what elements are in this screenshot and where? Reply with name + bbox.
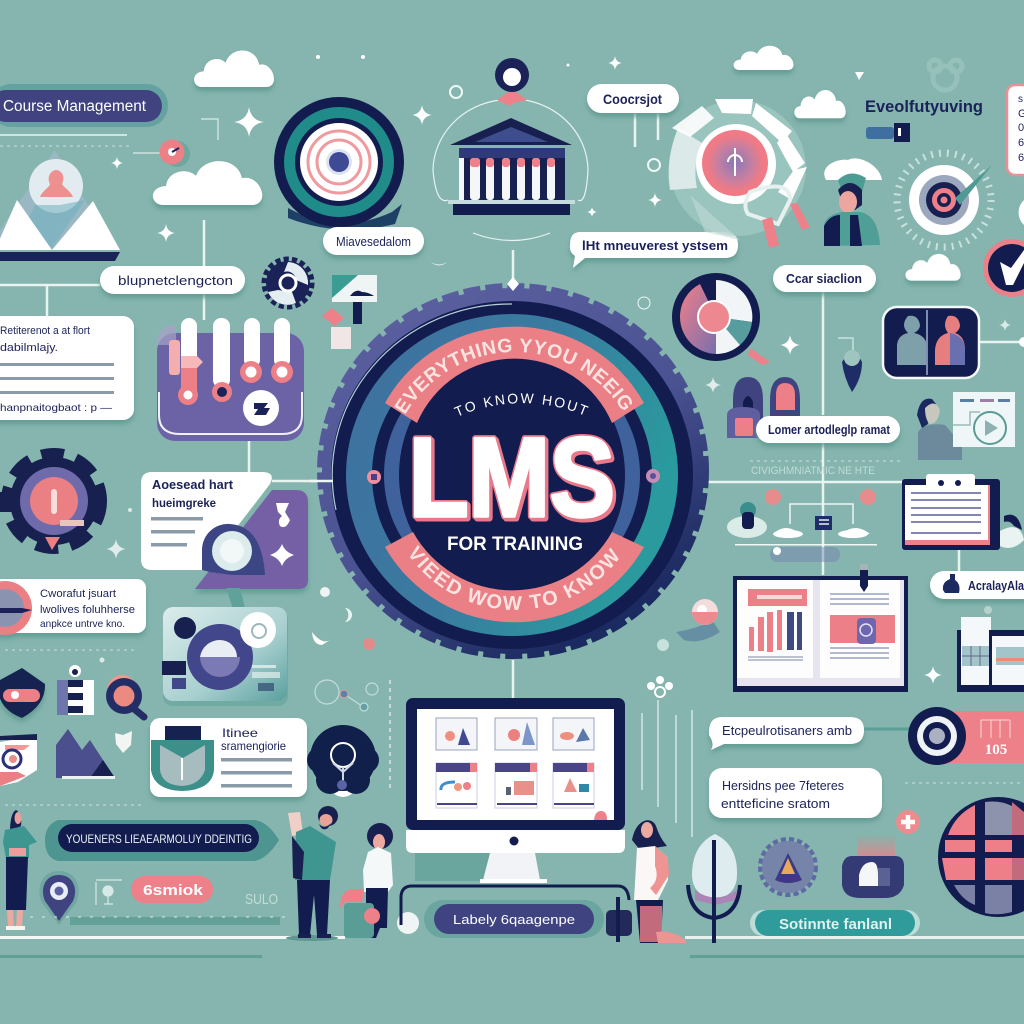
card: text: entteficine sratom: [721, 796, 830, 811]
monitor: [406, 698, 625, 883]
icon: open book: [733, 564, 908, 692]
bubble: management system: [570, 232, 738, 268]
label pill: course management: [0, 84, 168, 127]
blue ring: [346, 314, 678, 636]
pill: academy: [930, 571, 1024, 599]
top band: [385, 327, 644, 423]
icon: teal shield badge: [151, 726, 214, 791]
icon: building: [957, 606, 1024, 692]
connector lines: [0, 113, 1024, 837]
card: assessment with purple panel: [141, 472, 308, 589]
card: itinerary: [150, 718, 307, 797]
panel: gauge illustration: [162, 588, 288, 706]
navy rim: [331, 301, 693, 649]
bubble: text: Etcpeulrotisaners amb: [722, 724, 852, 738]
icon: purple gear with cone: [761, 840, 815, 894]
pill: car section: Ccar siaclion: [786, 271, 862, 286]
diamond marker: [507, 277, 519, 291]
panel: sliders: [157, 318, 304, 441]
heading: for training: FOR TRAINING: [447, 534, 583, 555]
stat number: 105: [985, 742, 1007, 758]
figure: man with paper: [286, 806, 338, 941]
heading: to know about: TO KNOW HOUT: [454, 393, 589, 416]
card: right top clipped: [1007, 85, 1024, 175]
icon: pen on target: [897, 153, 992, 247]
bubble: management system: lHt mneuverest ystsem: [582, 238, 728, 253]
icon: flower node: [647, 676, 673, 697]
slider one: [169, 318, 203, 405]
pediment: [450, 118, 572, 145]
screen thumbnails: [436, 718, 594, 808]
central emblem: [310, 283, 709, 659]
icon: lamp: [96, 880, 122, 905]
decorative stars: [106, 55, 1011, 684]
heading: LMS: LMS: [409, 415, 615, 540]
green arc: [1019, 200, 1024, 225]
stat badge: pink banner with target: [908, 707, 1024, 765]
icon: leaf tree lamp: [688, 834, 740, 943]
slider two: [212, 318, 232, 402]
label pill: teal: [750, 910, 920, 936]
card: assessment with purple panel: hueimgreke: [152, 496, 216, 510]
icon: broken badge wheel: [669, 99, 810, 248]
gear outer ring: [321, 287, 705, 655]
icon: check badge: [983, 239, 1024, 297]
target roundel: [274, 97, 404, 230]
faint logo: [929, 60, 962, 90]
card: text: Hersidns pee 7feteres: [722, 778, 844, 793]
card: reference text: Retiterenot a at flort: [0, 325, 90, 337]
side connector: [310, 480, 333, 482]
label pill: dark banner: [45, 820, 279, 861]
icon: node network: [315, 680, 378, 711]
figure: woman holding child: [632, 820, 686, 943]
navy core: [399, 353, 625, 597]
icon: small lamp: [838, 338, 862, 392]
icon: academy figure: [943, 574, 960, 593]
icon: white shield: [0, 734, 37, 786]
bar chart: [748, 610, 803, 660]
slider four: [271, 318, 293, 383]
card: reference text: hanpnaitogbaot : p —: [0, 402, 113, 414]
label pill: teal: Sotinnte fanlanl: [779, 916, 892, 933]
small floating icons: [100, 508, 669, 662]
pill: coocrsjot: Coocrsjot: [603, 91, 662, 107]
icon: pie gauge: [202, 524, 265, 575]
icon: mountains: [56, 729, 115, 779]
figure: woman with bag: [340, 823, 419, 938]
figure: person at screen: [917, 392, 1015, 460]
text: faint label: SULO: [245, 891, 278, 908]
icon: grid: [981, 720, 1010, 738]
pill: content: [756, 416, 900, 443]
icon: plus badge: [896, 810, 920, 834]
icon: pink dial: [160, 140, 190, 167]
org chart: [727, 489, 877, 562]
card: overview with dial: anpkce untrve kno.: [40, 618, 125, 630]
label pill: pink: 6smiok: [143, 882, 204, 899]
pill: blupnet: [100, 266, 245, 294]
navy inner ring: [372, 339, 652, 611]
icon: paper star: [115, 731, 132, 753]
icon: globe: [938, 797, 1024, 917]
card: reference text: [0, 316, 134, 420]
ruler band: [30, 917, 285, 925]
icon: landscape tile: [322, 275, 377, 349]
slider three: [240, 318, 262, 383]
icon: institution temple: [433, 58, 588, 240]
icon: network blob: [307, 725, 379, 797]
label pill: labely: [424, 900, 604, 938]
round badge: [243, 390, 279, 426]
label pill: pink: [131, 876, 213, 903]
icon: padlocks: [727, 377, 800, 438]
bubble: text: [709, 717, 864, 750]
icon: small device: [866, 123, 910, 142]
icon: striped stack: [57, 665, 94, 715]
figure: woman at left: [3, 810, 37, 930]
ground lines: [0, 936, 1024, 958]
label pill: labely: Labely 6qaagenpe: [453, 912, 575, 927]
heading: evolving: Eveolfutyuving: [865, 97, 983, 116]
card: reference text: dabilmlajy.: [0, 342, 58, 354]
card: right top clipped: 6: [1018, 137, 1024, 149]
pill: content: Lomer artodleglp ramat: [768, 423, 891, 437]
pill: blupnet: blupnetclengcton: [118, 274, 233, 288]
icon: mountain with profile: [0, 150, 120, 261]
icon: small gear: [265, 260, 311, 306]
icon: luggage: [606, 897, 632, 942]
card: itinerary: Itinee: [222, 726, 258, 740]
card: dark figures image: [883, 307, 1024, 378]
clouds: [153, 46, 961, 281]
label pill: course management: Course Management: [3, 98, 147, 115]
bottom band: [385, 532, 644, 622]
heading: LMS: LMS: [409, 415, 615, 540]
card: text: [709, 768, 882, 818]
pill: coocrsjot: [587, 84, 679, 113]
card: right top clipped: 6: [1018, 152, 1024, 164]
small triangle: [855, 72, 864, 80]
icon: magnifier: [106, 675, 144, 717]
faint caption: CIVIGHMNIATMIC NE HTE: [751, 465, 875, 477]
connector: bubble to target: [864, 728, 910, 730]
icon: notepad: [902, 474, 1024, 550]
second blue ring: [384, 351, 640, 599]
heading: bottom arc: VIEED WOW TO KNOW: [410, 544, 619, 610]
card: overview with dial: [0, 579, 146, 635]
desk bracket: [401, 886, 629, 925]
columns: [459, 158, 565, 201]
side studs: [367, 469, 660, 484]
icon: shield with pill: [0, 668, 45, 718]
pill: miavesedalom: Miavesedalom: [336, 235, 411, 249]
card: itinerary: sramengiorie: [221, 739, 286, 753]
card: overview with dial: Cworafut jsuart: [40, 588, 116, 600]
icon: pink ball with swoosh: [676, 599, 720, 641]
heading: top arc: EVERYTHING YYOU NEEIG: [394, 338, 632, 414]
icon: sparkle: [270, 544, 294, 566]
icon: large gear: [0, 455, 100, 550]
icon: location pin: [39, 871, 79, 925]
card: overview with dial: lwolives foluhherse: [40, 604, 135, 616]
card: right top clipped: 0: [1018, 122, 1024, 134]
pill: miavesedalom: [323, 227, 424, 255]
figure: person with cloud: [824, 158, 882, 246]
label pill: dark banner: YOUENERS LIEAEARMOLUY DDEINTIG: [66, 834, 252, 846]
card: assessment with purple panel: Aoesead hart: [152, 478, 234, 492]
card: right top clipped: s: [1018, 94, 1023, 105]
medal: [495, 58, 529, 106]
pill: car section: [773, 265, 876, 292]
icon: pie wheel: [672, 273, 770, 365]
icon: note glyph: [276, 503, 290, 527]
icon: navy dome device: [842, 834, 904, 898]
